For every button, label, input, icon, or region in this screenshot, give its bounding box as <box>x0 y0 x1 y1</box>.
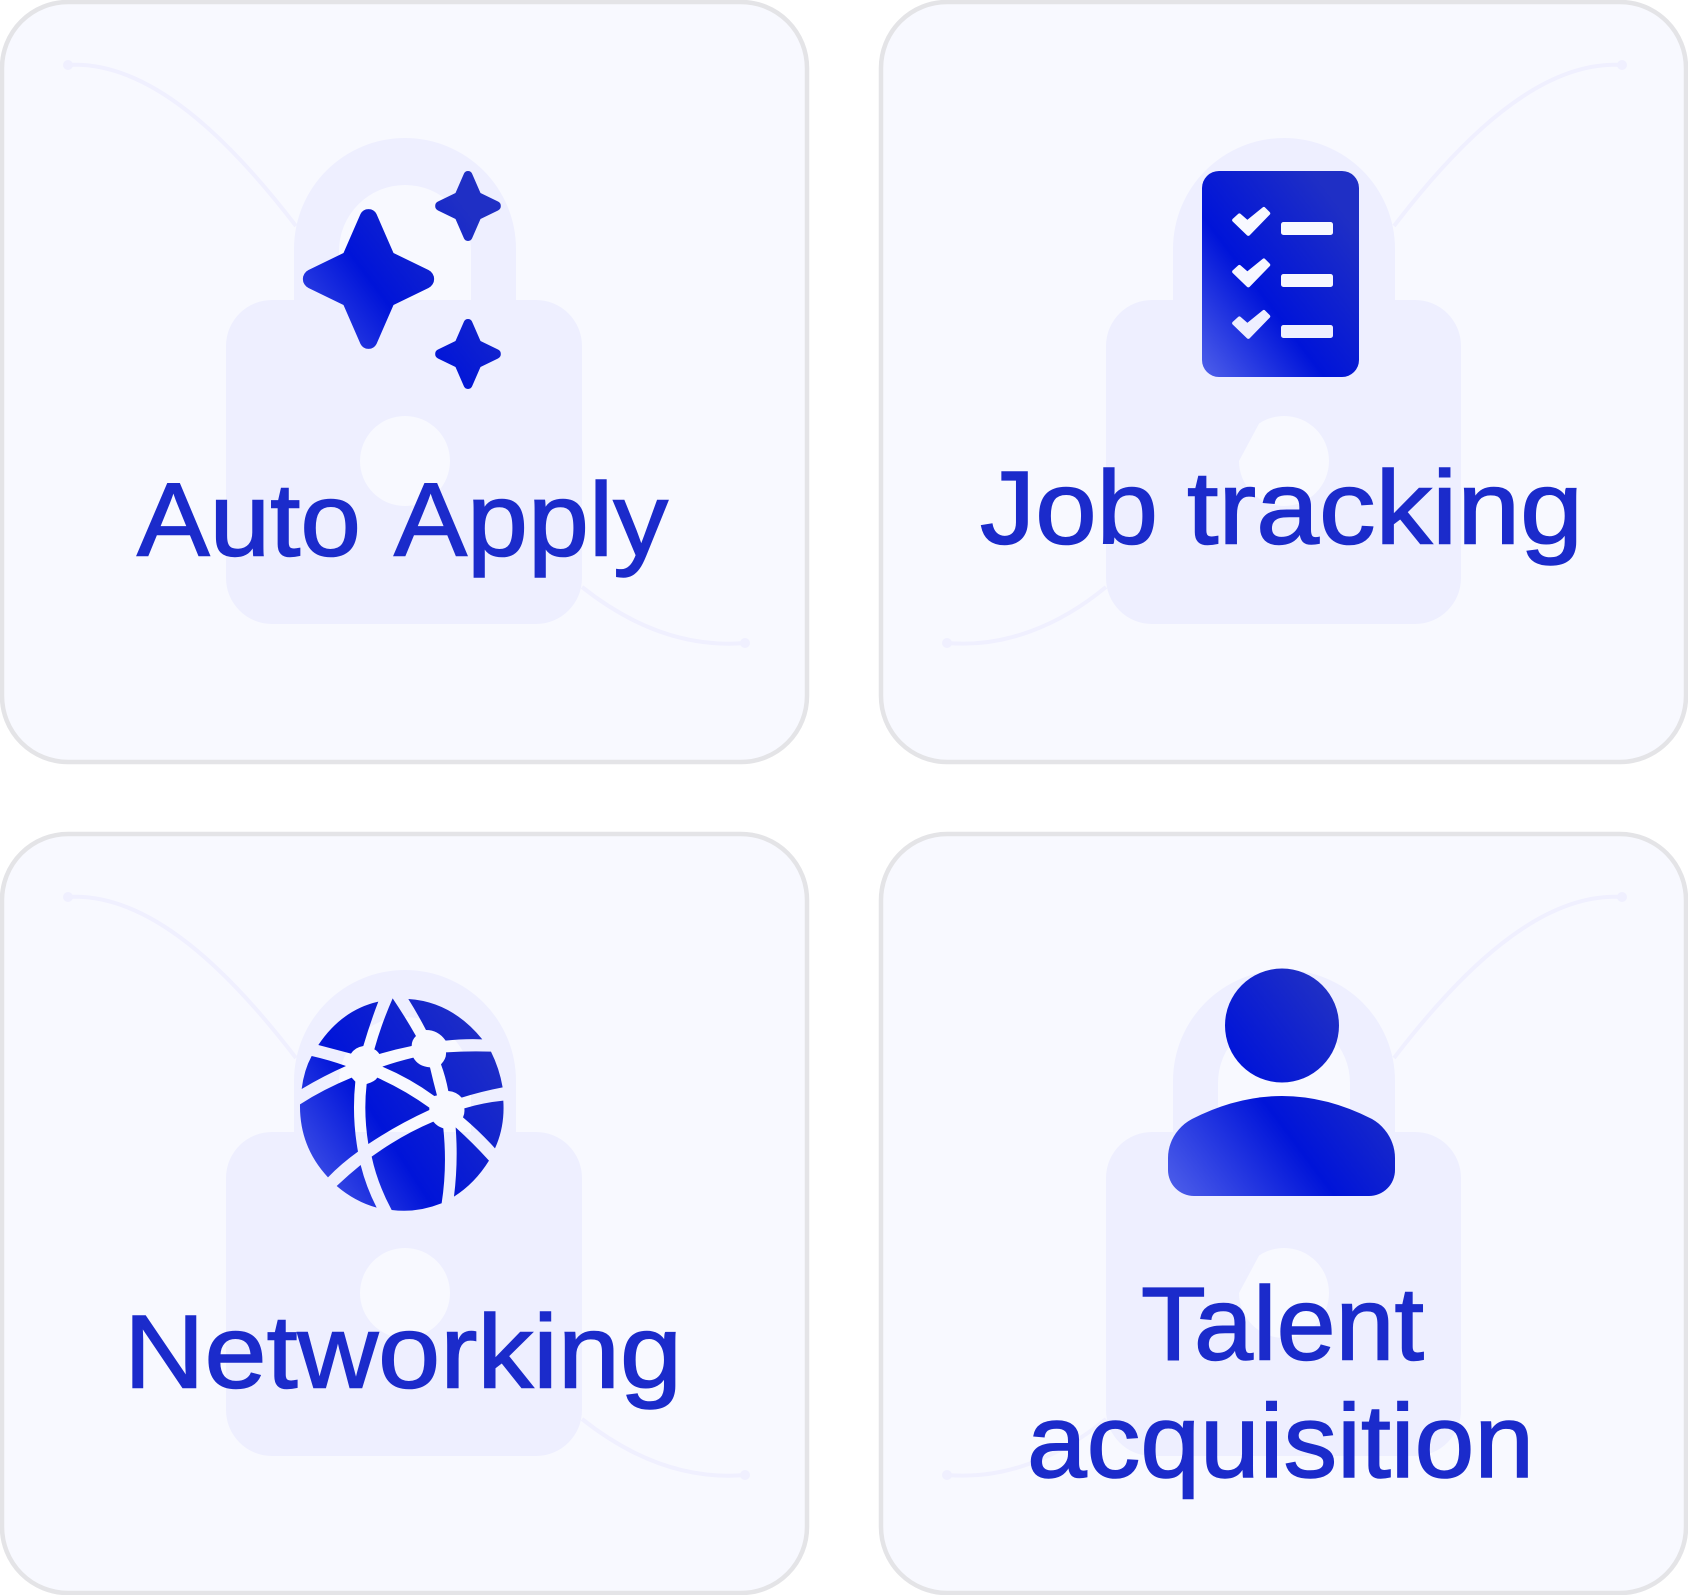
connector curves <box>63 60 750 648</box>
icon: background padlock <box>226 138 582 624</box>
panel: Talent acquisition <box>881 834 1686 1593</box>
heading: Job tracking: Job <box>980 450 1158 566</box>
heading: Talent acquisition: acquisition <box>1027 1384 1534 1500</box>
connector curves <box>942 60 1627 648</box>
icon: background padlock <box>1106 138 1461 624</box>
heading: Job tracking <box>980 450 1583 566</box>
icon: network globe <box>300 998 504 1211</box>
heading: Talent acquisition: Talent <box>1141 1266 1424 1382</box>
heading: Auto Apply: Apply <box>394 462 668 578</box>
panel: Auto Apply <box>2 2 807 762</box>
icon: checklist document <box>1202 171 1359 377</box>
connector curves <box>942 892 1627 1480</box>
panel: Networking <box>2 834 807 1593</box>
heading: Talent acquisition <box>1027 1266 1534 1500</box>
heading: Auto Apply <box>137 462 668 578</box>
connector curves <box>63 892 750 1480</box>
icon: background padlock <box>1106 970 1461 1456</box>
heading: Job tracking: tracking <box>1187 450 1583 566</box>
icon: sparkles <box>303 171 501 389</box>
heading: Auto Apply: Auto <box>137 462 361 578</box>
panel: Job tracking <box>881 2 1686 762</box>
icon: person <box>1168 968 1395 1196</box>
icon: background padlock <box>226 970 582 1456</box>
heading: Networking: Networking <box>124 1294 682 1410</box>
